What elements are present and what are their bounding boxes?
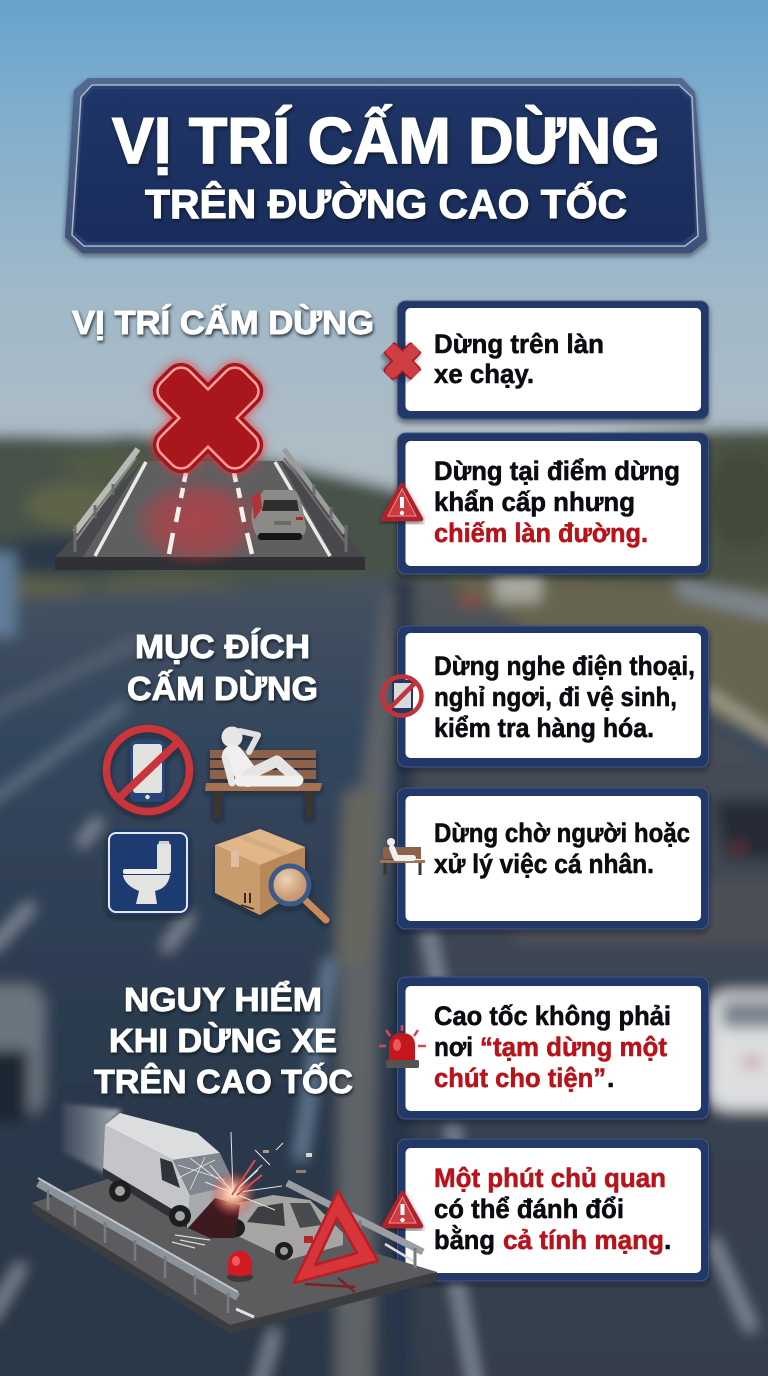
card 1 bbox=[398, 301, 708, 419]
van bbox=[63, 1103, 235, 1228]
icon: no phone bbox=[106, 728, 190, 812]
title text: TRÊN ĐƯỜNG CAO TỐC bbox=[145, 181, 627, 227]
card 3 text: Dừng nghe điện thoại, bbox=[434, 651, 695, 681]
heading: vị trí cấm dừng: VỊ TRÍ CẤM DỪNG bbox=[72, 304, 374, 341]
car bbox=[252, 490, 306, 540]
card 3 text bbox=[434, 651, 695, 743]
left guard rail bbox=[38, 1178, 238, 1313]
title plaque bbox=[65, 78, 707, 253]
icon: small no phone bbox=[382, 676, 422, 716]
illustration: road with parked car bbox=[55, 449, 365, 570]
icon: small bench bbox=[380, 838, 425, 875]
card 5 text: chút cho tiện” bbox=[434, 1063, 606, 1093]
card 3 text: nghỉ ngơi, đi vệ sinh, bbox=[434, 682, 677, 712]
icon: small red X bbox=[380, 338, 425, 384]
card 4 text bbox=[434, 818, 690, 879]
heading: nguy hiểm: KHI DỪNG XE bbox=[109, 1022, 337, 1059]
icon: toilet sign bbox=[107, 830, 189, 915]
heading: mục đích cấm dừng: CẤM DỪNG bbox=[127, 670, 318, 707]
icon: small red beacon bbox=[379, 1025, 426, 1068]
card 2 text: chiếm làn đường. bbox=[434, 518, 648, 548]
heading: mục đích cấm dừng bbox=[127, 628, 318, 707]
card 4 bbox=[398, 788, 708, 929]
heading: mục đích cấm dừng: MỤC ĐÍCH bbox=[135, 628, 310, 665]
card 4 text: Dừng chờ người hoặc bbox=[434, 818, 690, 848]
card 5 bbox=[398, 977, 708, 1119]
card 5 text: “tạm dừng một bbox=[480, 1032, 667, 1062]
warning triangle bbox=[294, 1191, 378, 1292]
heading: nguy hiểm: TRÊN CAO TỐC bbox=[94, 1062, 353, 1100]
card 5 text: nơi bbox=[434, 1032, 473, 1062]
card 5 text bbox=[434, 1001, 671, 1093]
collision sparks bbox=[172, 1132, 312, 1248]
icon: large neon red X bbox=[143, 353, 273, 483]
card 6 text: . bbox=[664, 1225, 671, 1255]
card 5 text: Cao tốc không phải bbox=[434, 1001, 671, 1031]
illustration: crash scene on highway bbox=[32, 1103, 437, 1334]
card 6 text: cả tính mạng bbox=[503, 1225, 664, 1255]
icon: small warning triangle bbox=[383, 485, 421, 519]
title text: VỊ TRÍ CẤM DỪNG bbox=[112, 104, 660, 177]
card 2 text: khẩn cấp nhưng bbox=[434, 487, 635, 517]
title text bbox=[112, 104, 660, 227]
card 2 text bbox=[434, 456, 680, 548]
red beacon on road bbox=[227, 1251, 253, 1282]
card 2 bbox=[398, 433, 708, 574]
card 5 text: . bbox=[607, 1063, 614, 1093]
card 6 text bbox=[434, 1163, 671, 1255]
heading: nguy hiểm bbox=[94, 981, 353, 1100]
card 3 bbox=[398, 626, 708, 767]
card 4 text: xử lý việc cá nhân. bbox=[434, 849, 654, 879]
right guard rail bbox=[287, 1183, 423, 1268]
card 1 text: Dừng trên làn bbox=[434, 329, 604, 359]
card 6 text: có thể đánh đổi bbox=[434, 1194, 624, 1224]
card 6 text: bằng bbox=[434, 1225, 495, 1255]
card 6 text: Một phút chủ quan bbox=[434, 1163, 666, 1193]
card 3 text: kiểm tra hàng hóa. bbox=[434, 713, 654, 743]
card 1 text: xe chạy. bbox=[434, 359, 534, 389]
silver car bbox=[222, 1195, 343, 1260]
card 6 bbox=[398, 1139, 708, 1281]
heading: nguy hiểm: NGUY HIỂM bbox=[124, 981, 322, 1018]
card 1 text bbox=[434, 329, 604, 389]
icon: person resting on bench bbox=[205, 726, 322, 818]
icon: box with magnifier bbox=[215, 829, 326, 920]
icon: small warning triangle lower bbox=[384, 1193, 421, 1226]
card 2 text: Dừng tại điểm dừng bbox=[434, 456, 680, 486]
